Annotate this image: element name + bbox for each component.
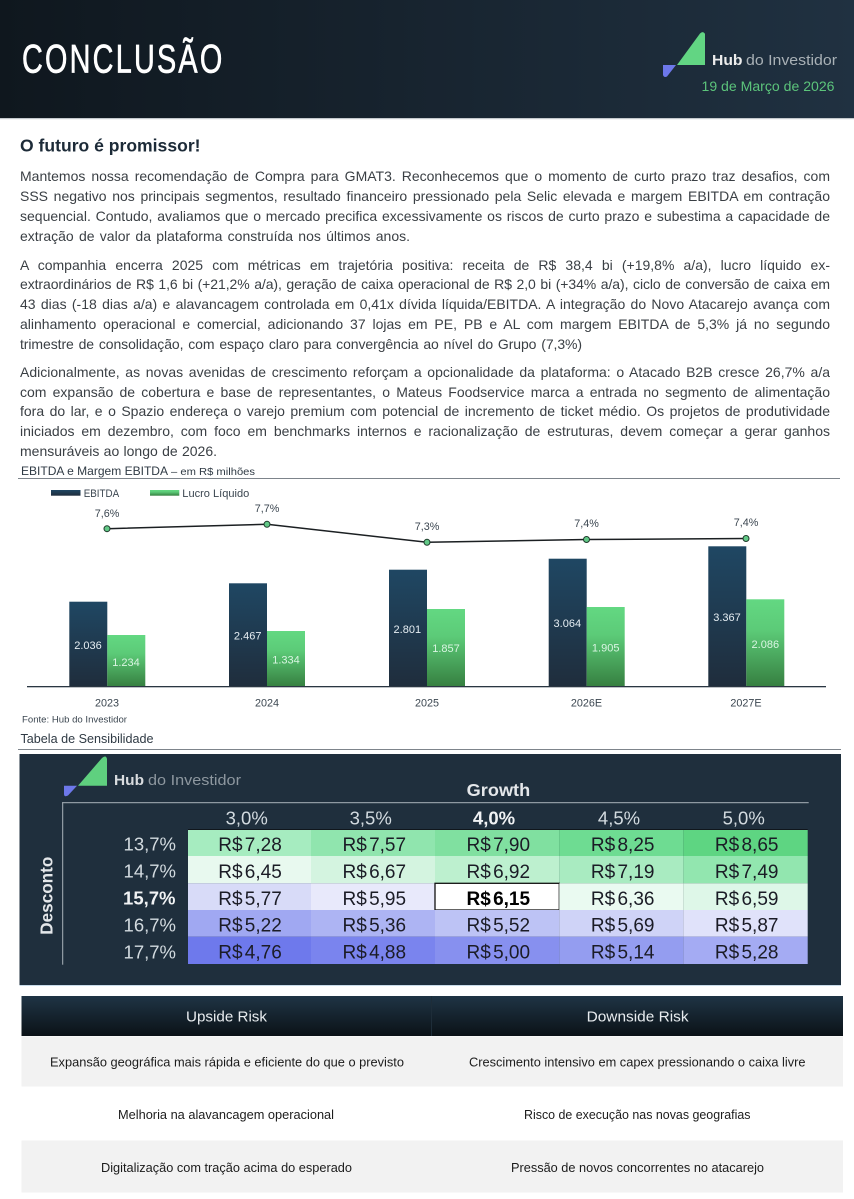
text block: paragraph 3, growth avenues: Adicionalmente, as novas avenidas de crescimento reforçam a opcionalidade da plataforma: o Atacado B2B cresce 26,7% a/a [20,364,830,380]
column headers: growth [226,808,765,828]
heatmap values: R$ 5,00 [467,943,530,964]
risk table [22,996,843,1192]
row headers: discount: 15,7% [123,888,176,908]
logo: Hub do Investidor: do Investidor [746,52,837,69]
column headers: growth: 4,0% [473,808,515,828]
row headers: discount: 13,7% [124,834,176,854]
risk row 3: Pressão de novos concorrentes no atacarejo [511,1161,764,1175]
heatmap values: R$ 8,25 [591,835,654,856]
heatmap values: R$ 6,15 [467,889,531,910]
text block: paragraph 1, recommendation: Mantemos nossa recomendação de Compra para GMAT3. Reconhecemos que o momento de curto prazo traz desafios, com [20,168,830,184]
heatmap values: R$ 7,49 [715,862,778,883]
risk table header: Upside Risk [186,1008,267,1026]
heatmap values: R$ 5,52 [467,916,530,937]
heatmap values: R$ 4,76 [218,943,282,964]
combo chart: EBITDA, Lucro Líquido and margin [27,488,826,710]
logo: panel [64,756,241,796]
bar value labels: 1.334 [272,654,300,666]
logo: Hub do Investidor [663,32,837,77]
row headers: discount: 14,7% [124,860,176,882]
column headers: growth: 3,5% [350,808,392,828]
heatmap values: R$ 5,22 [218,916,282,937]
legend: Lucro Líquido [182,488,249,500]
risk row 1: Expansão geográfica mais rápida e eficiente do que o previsto [50,1056,404,1070]
axis titles: Desconto [36,857,56,935]
chart heading [18,464,840,479]
heatmap values: R$ 5,87 [715,916,778,937]
panel: sensitivity table [20,754,841,986]
text block: paragraph 3, growth avenues: mensuráveis ao longo de 2026. [20,443,217,459]
legend: EBITDA [84,488,120,500]
logo: Hub do Investidor: Hub [712,52,742,69]
column headers: growth: 4,5% [598,808,640,828]
heatmap values: R$ 5,14 [591,943,655,964]
text block: paragraph 1, recommendation: SSS negativo nos principais segmentos, resultado financeiro pressionado pela Selic elevada e margem EBITDA em contração [20,188,830,204]
text block: paragraph 1, recommendation: sequencial. Contudo, avaliamos que o mercado precifica excessivamente os riscos de curto prazo e subestima a capacidade de [20,208,830,224]
text block: paragraph 3, growth avenues: fora do lar, e o Spazio endereça o varejo premium com potencial de incremento de ticket médio. Os projetos de produtividade [20,403,830,419]
heatmap values: R$ 5,95 [343,889,406,910]
margin labels [95,503,759,533]
bar value labels [74,612,779,669]
heatmap values: R$ 6,67 [343,862,406,883]
margin labels: 7,4% [574,518,599,530]
row headers: discount: 16,7% [124,914,176,936]
legend [51,488,249,500]
risk row 2 [118,1108,750,1122]
heatmap values: R$ 5,36 [343,916,406,937]
risk table header [22,996,843,1036]
heatmap values: R$ 7,90 [467,835,530,856]
text block: paragraph 3, growth avenues: iniciados em dezembro, com foco em benchmarks internos e racionalização de estruturas, devem começar a gerar ganhos [20,423,830,439]
heatmap values: R$ 6,92 [467,862,530,883]
category labels: 2025 [415,698,439,710]
margin labels: 7,4% [734,517,759,529]
heatmap values: R$ 6,45 [218,862,282,883]
bar value labels: 1.905 [592,642,619,654]
heatmap cells [188,829,808,964]
logo: panel: Hub [114,772,144,789]
title: CONCLUSÃO [22,37,224,82]
heatmap values: R$ 6,36 [591,889,654,910]
risk row 3: Digitalização com tração acima do esperado [101,1161,352,1175]
heatmap values: R$ 7,19 [591,862,654,883]
row headers: discount: 17,7% [124,942,176,962]
heatmap values: R$ 8,65 [715,835,778,856]
heading: O futuro é promissor!: O futuro é promissor! [20,136,200,156]
margin labels: 7,6% [95,508,120,520]
heatmap values: R$ 5,77 [218,889,282,910]
risk row 1: Crescimento intensivo em capex pressionando o caixa livre [469,1056,806,1070]
category labels: 2023 [95,698,119,710]
risk row 2: Risco de execução nas novas geografias [524,1108,750,1122]
risk row 1 [50,1056,806,1070]
risk row 2: Melhoria na alavancagem operacional [118,1108,334,1122]
category labels: 2027E [730,698,762,710]
margin line [104,521,749,545]
risk row 3 [101,1161,764,1175]
text block: paragraph 3, growth avenues [20,364,830,459]
chart heading: EBITDA e Margem EBITDA [21,464,169,478]
text block: paragraph 2, 2025 metrics: extraordinários de R$ 1,6 bi (+21,2% a/a), geração de caixa operacional de R$ 2,0 bi (+34% a/a), ciclo de conversão de caixa em [20,276,830,292]
axis [27,686,826,687]
chart heading: – em R$ milhões [171,467,255,478]
margin labels: 7,3% [415,521,440,533]
axis titles: Growth [467,780,530,800]
header banner [0,0,854,119]
column headers: growth: 5,0% [723,808,765,828]
table axes [62,802,809,965]
heatmap values: R$ 6,59 [715,889,778,910]
text block: paragraph 1, recommendation: extração de valor da plataforma construída nos últimos anos. [20,228,410,244]
bar value labels: 3.064 [554,618,581,630]
logo: panel: do Investidor [148,772,241,789]
text block: paragraph 2, 2025 metrics: alinhamento operacional e comercial, adicionando 37 lojas em PE, PB e AL com margem EBITDA de 5,3% já no segundo [20,316,830,332]
text block: paragraph 2, 2025 metrics: A companhia encerra 2025 com métricas em trajetória positiva: receita de R$ 38,4 bi (+19,8% a/a), lucro líquido ex- [20,256,830,272]
bar value labels: 2.036 [74,640,102,652]
risk table header: Downside Risk [587,1008,689,1026]
category labels: 2026E [571,698,602,710]
text block: paragraph 1, recommendation [20,168,830,244]
bar value labels: 3.367 [713,612,741,624]
bar value labels: 2.086 [752,639,779,651]
heatmap values: R$ 7,28 [218,835,282,856]
heatmap values: R$ 4,88 [343,943,406,964]
column headers: growth: 3,0% [226,808,268,828]
source note: Fonte: Hub do Investidor [22,714,128,726]
row headers: discount [123,834,176,962]
bars [69,546,784,687]
bar value labels: 1.857 [432,643,460,655]
category labels: 2024 [255,698,279,710]
bar value labels: 2.801 [394,624,421,636]
heatmap values [218,835,778,964]
text block: paragraph 2, 2025 metrics: trimestre de consolidação, com espaço claro para convergência ao nível do Grupo (7,3%) [20,336,582,352]
text block: paragraph 3, growth avenues: com expansão de cobertura e base de representantes, o Mateus Foodservice marca a entrada no segmento de alimentação [20,384,830,400]
bar value labels: 1.234 [112,657,140,669]
text block: paragraph 2, 2025 metrics: 43 dias (-18 dias a/a) e alavancagem controlada em 0,41x dívida líquida/EBITDA. A integração do Novo Atacarejo avança com [20,296,830,312]
heatmap values: R$ 7,57 [343,835,406,856]
category labels [95,698,762,710]
table heading: Tabela de Sensibilidade [20,731,154,746]
risk row backgrounds [22,1036,843,1192]
date: 19 de Março de 2026 [702,79,834,94]
margin labels: 7,7% [255,503,280,515]
heatmap values: R$ 5,28 [715,943,778,964]
axis titles [36,780,530,935]
bar value labels: 2.467 [234,630,261,642]
heatmap values: R$ 5,69 [591,916,654,937]
text block: paragraph 2, 2025 metrics [20,256,830,352]
